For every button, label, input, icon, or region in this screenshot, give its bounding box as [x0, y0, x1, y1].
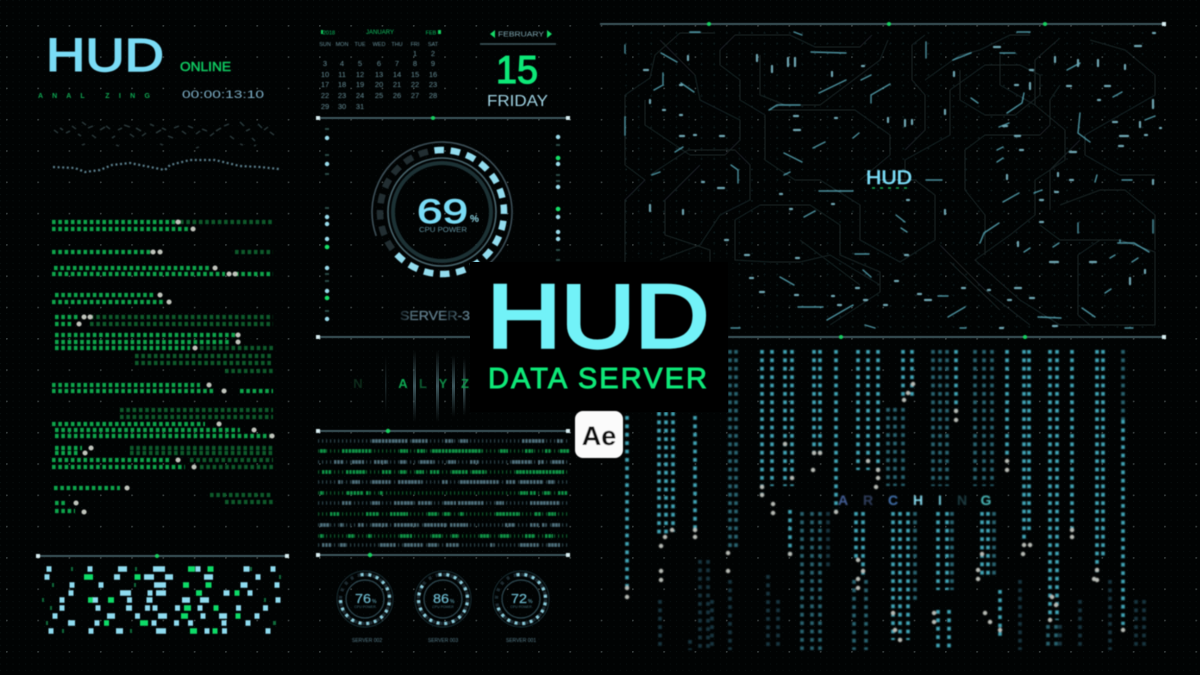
- gauge: 86 percent: [415, 571, 471, 627]
- gauge: 76 percent: CPU POWER: [354, 605, 376, 609]
- bright columns: [627, 350, 1123, 650]
- gray row fills: [320, 441, 564, 545]
- panel: analyzing beams: [353, 350, 469, 422]
- calendar days: 7: [395, 59, 399, 68]
- gauge rings: [352, 122, 532, 302]
- calendar days: 26: [393, 91, 401, 100]
- gauge captions: SERVER 001: [506, 638, 536, 644]
- green blocks: [84, 569, 240, 631]
- date number: 15: [496, 49, 538, 92]
- panel: binary data rows: [316, 429, 570, 557]
- calendar month header: [321, 30, 441, 36]
- percent sign: %: [470, 214, 479, 225]
- gauge: 76 percent: 76: [355, 591, 371, 606]
- calendar days: 31: [356, 102, 364, 111]
- icon: after effects badge: Ae: [582, 421, 616, 451]
- black backing: [470, 262, 728, 412]
- calendar days: 6: [377, 59, 381, 68]
- calendar days: [321, 49, 437, 111]
- analyzing label: Z: [461, 376, 469, 391]
- calendar days: 25: [375, 91, 383, 100]
- gauge: 72 percent: 72: [511, 591, 527, 606]
- calendar days: 3: [323, 59, 327, 68]
- vertical light bars: [385, 350, 466, 422]
- calendar days: 23: [338, 91, 346, 100]
- gauge: 76 percent: [337, 571, 393, 627]
- calendar days: 10: [321, 70, 329, 79]
- circuit center label: HUD: [866, 168, 912, 189]
- weekday labels: SAT: [428, 42, 439, 48]
- green character rows: [52, 222, 273, 512]
- calendar days: 16: [429, 70, 437, 79]
- subtitle: DATA SERVER: [488, 363, 707, 395]
- calendar days: 1: [413, 49, 417, 58]
- panel: title block: [470, 262, 728, 412]
- weekday labels: SUN: [319, 42, 331, 48]
- analyzing label: Y: [439, 376, 448, 391]
- calendar days: 13: [375, 70, 383, 79]
- calendar days: 18: [338, 80, 346, 89]
- panel: date widget: [480, 30, 556, 110]
- gauge: 72 percent: [493, 571, 549, 627]
- calendar days: 12: [356, 70, 364, 79]
- weekday labels: [319, 42, 439, 48]
- label: analyzing: A N A L Z I N G: [38, 93, 151, 100]
- calendar days: 17: [321, 80, 329, 89]
- calendar days: 22: [321, 91, 329, 100]
- calendar days: 23: [429, 80, 437, 89]
- row backgrounds: [318, 441, 568, 545]
- panel: bottom-left signal blocks: [36, 554, 289, 631]
- bottom rail: [728, 335, 1166, 339]
- calendar month header: JANUARY: [366, 30, 394, 36]
- cyan blocks: [44, 569, 280, 631]
- analyzing label: [353, 376, 469, 391]
- panel: server gauges: [337, 571, 549, 644]
- calendar days: 21: [393, 80, 401, 89]
- calendar days: 27: [411, 91, 419, 100]
- analyzing label: A: [398, 376, 408, 391]
- status: online: ONLINE: [180, 59, 231, 74]
- gauge captions: SERVER 002: [352, 638, 382, 644]
- calendar days: 11: [338, 70, 346, 79]
- weekday: FRIDAY: [487, 93, 548, 110]
- calendar days: 15: [411, 70, 419, 79]
- panel: cpu gauge: [325, 122, 560, 323]
- divider rail: under gauge: [316, 335, 480, 339]
- green row fills: [320, 451, 570, 536]
- top rail: [316, 429, 570, 433]
- gauge: 86 percent: CPU POWER: [432, 605, 454, 609]
- calendar days: 8: [413, 59, 417, 68]
- gauge value: 69: [417, 193, 468, 231]
- gauge captions: [352, 638, 536, 644]
- searching label: H: [913, 492, 923, 508]
- bottom rail: [316, 553, 570, 557]
- gauge segments: [373, 143, 511, 281]
- calendar days: 19: [356, 80, 364, 89]
- analyzing label: N: [353, 376, 363, 391]
- panel: circuit map: [600, 22, 1166, 339]
- searching label: A: [838, 492, 848, 508]
- particle scatter: [54, 122, 274, 148]
- calendar days: 14: [393, 70, 401, 79]
- calendar days: 20: [375, 80, 383, 89]
- panel: calendar: [319, 30, 441, 111]
- side status dots: [325, 129, 560, 319]
- searching label: I: [938, 492, 942, 508]
- calendar days: 5: [358, 59, 362, 68]
- medium columns: [730, 350, 1123, 650]
- month selector: FEBRUARY: [498, 32, 544, 38]
- divider rail: [36, 554, 289, 558]
- calendar month header: FEB: [426, 30, 437, 36]
- server label: SERVER-3: [400, 308, 470, 323]
- gauge: 76 percent: %: [372, 599, 377, 605]
- timecode: 00:00:13:10: [182, 89, 264, 101]
- gauge: 86 percent: 86: [433, 591, 449, 606]
- white column heads: [627, 384, 1123, 640]
- searching label: R: [863, 492, 873, 508]
- calendar days: 4: [340, 59, 344, 68]
- weekday labels: THU: [391, 42, 403, 48]
- calendar days: 2: [431, 49, 435, 58]
- calendar days: 9: [431, 59, 435, 68]
- calendar month header: 2018: [323, 30, 335, 36]
- bright node dots: [644, 33, 1161, 328]
- circuit traces: [625, 33, 1155, 325]
- analyzing label: L: [419, 376, 427, 391]
- top rail: [600, 22, 1166, 26]
- gauge captions: SERVER 003: [428, 638, 458, 644]
- dotted lattice: [625, 32, 1155, 330]
- icon: after effects badge: [575, 411, 623, 458]
- gauge: 72 percent: %: [528, 599, 533, 605]
- gauge: 86 percent: %: [450, 599, 455, 605]
- weekday labels: WED: [373, 42, 385, 48]
- panel: left column header and data streams: [38, 29, 279, 512]
- calendar days: 24: [356, 91, 364, 100]
- divider rail: under calendar: [316, 116, 570, 120]
- searching label: N: [957, 492, 967, 508]
- panel: matrix rain: [627, 350, 1144, 650]
- calendar days: 22: [411, 80, 419, 89]
- main title: HUD: [487, 266, 709, 366]
- gauge: 72 percent: CPU POWER: [510, 605, 532, 609]
- weekday labels: FRI: [411, 42, 420, 48]
- searching label: G: [981, 492, 992, 508]
- searching label: C: [888, 492, 898, 508]
- waveform: [53, 160, 279, 172]
- calendar days: 29: [321, 102, 329, 111]
- weekday labels: MON: [336, 42, 348, 48]
- gauge caption: CPU POWER: [419, 225, 468, 234]
- calendar days: 28: [429, 91, 437, 100]
- heading: HUD: HUD: [46, 29, 164, 81]
- bright trace segments: [625, 32, 1155, 328]
- calendar days: 30: [338, 102, 346, 111]
- weekday labels: TUE: [354, 42, 366, 48]
